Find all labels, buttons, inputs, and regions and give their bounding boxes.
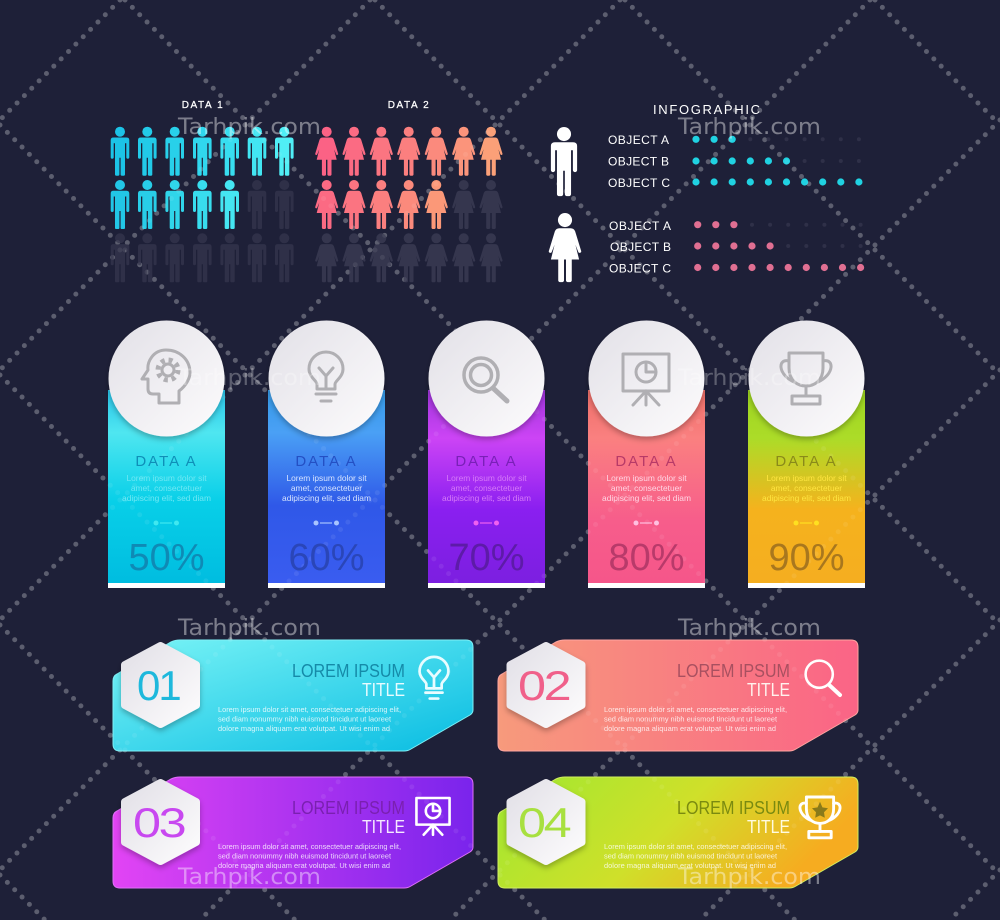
card body 50% <box>108 390 225 588</box>
banner 04 text: TITLE <box>747 817 790 837</box>
card 3 text: adipiscing elit, sed diam <box>442 493 531 503</box>
card 4 text: amet, consectetuer <box>611 483 682 493</box>
icon: magnifier <box>464 358 507 401</box>
card body 90% <box>748 390 865 588</box>
banner 03 text: TITLE <box>362 817 405 837</box>
number 04: 04 <box>518 799 571 846</box>
labels: female objects: OBJECT B <box>610 240 671 254</box>
hexagon badge 01 <box>125 646 196 724</box>
pictogram: data 1 men <box>111 127 294 282</box>
banner 01 text: Lorem ipsum dolor sit amet, consectetuer adipiscing elit, <box>218 705 401 714</box>
pictogram: data 2 women <box>315 127 503 282</box>
labels: male objects: OBJECT C <box>608 176 670 190</box>
card 5 text: DATA A <box>775 453 838 470</box>
labels: female objects <box>609 219 671 276</box>
watermarks: Tarhpik.com <box>177 865 321 890</box>
heading: data 2: DATA 2 <box>388 100 430 111</box>
dot scale: female <box>694 221 864 271</box>
icon: head with gear <box>142 350 190 403</box>
banner 03 text: dolore magna aliquam erat volutpat. Ut wisi enim ad <box>218 861 390 870</box>
icon: trophy <box>781 353 831 404</box>
icon: presentation board <box>623 354 669 405</box>
card 5 text: Lorem ipsum dolor sit <box>766 473 847 483</box>
circle badge 3 <box>428 320 544 436</box>
card 5 text: amet, consectetuer <box>771 483 842 493</box>
heading: infographic: INFOGRAPHIC <box>653 102 760 117</box>
banner 01 text <box>218 661 405 733</box>
number 03: 03 <box>133 799 185 846</box>
card 3 text <box>442 453 531 579</box>
labels: female objects: OBJECT C <box>609 262 671 276</box>
card 3 text: DATA A <box>455 453 518 470</box>
watermarks: Tarhpik.com <box>677 616 821 641</box>
card body 80% <box>588 390 705 588</box>
circle badge 4 <box>588 320 704 436</box>
card 1 text <box>122 453 211 579</box>
watermarks <box>177 115 821 890</box>
banner 03 body <box>113 777 473 888</box>
watermarks: Tarhpik.com <box>677 366 821 391</box>
banner 03 text: Lorem ipsum dolor sit amet, consectetuer adipiscing elit, <box>218 842 401 851</box>
labels: male objects: OBJECT B <box>608 154 669 168</box>
banner 01 text: TITLE <box>362 680 405 700</box>
circle badge 1 <box>108 320 224 436</box>
banner 02 text: LOREM IPSUM <box>677 661 790 681</box>
icon: white woman <box>549 213 581 282</box>
banner 02 text: dolore magna aliquam erat volutpat. Ut wisi enim ad <box>604 724 776 733</box>
card 4 text: DATA A <box>615 453 678 470</box>
banner 02 text: sed diam nonummy nibh euismod tincidunt ut laoreet <box>604 714 777 724</box>
number 02: 02 <box>518 662 570 709</box>
card 5 text <box>762 453 851 579</box>
watermarks: Tarhpik.com <box>177 366 321 391</box>
banner 03 text: LOREM IPSUM <box>292 798 405 818</box>
banner 01 text: sed diam nonummy nibh euismod tincidunt ut laoreet <box>218 714 391 724</box>
card 4 text <box>602 453 691 579</box>
card 2 text: Lorem ipsum dolor sit <box>286 473 367 483</box>
card 4 text: adipiscing elit, sed diam <box>602 493 691 503</box>
labels: female objects: OBJECT A <box>609 219 671 233</box>
labels: male objects: OBJECT A <box>608 133 669 147</box>
heading: data 1: DATA 1 <box>182 100 224 111</box>
watermarks: Tarhpik.com <box>677 115 821 140</box>
banner 04 text: Lorem ipsum dolor sit amet, consectetuer adipiscing elit, <box>604 842 787 851</box>
hexagon badge 02 <box>510 646 582 724</box>
icon: white man <box>551 127 577 196</box>
banner icon: magnifier <box>806 661 840 695</box>
banner icon: bulb <box>420 657 448 699</box>
banner 01 text: LOREM IPSUM <box>292 661 405 681</box>
card 3 text: Lorem ipsum dolor sit <box>446 473 527 483</box>
card body 60% <box>268 390 385 588</box>
card 1 text: adipiscing elit, sed diam <box>122 493 211 503</box>
card body 70% <box>428 390 545 588</box>
card 2 text <box>282 453 371 579</box>
watermarks: Tarhpik.com <box>677 865 821 890</box>
card 1 text: DATA A <box>135 453 198 470</box>
card 5 text: adipiscing elit, sed diam <box>762 493 851 503</box>
watermarks: Tarhpik.com <box>177 616 321 641</box>
card 2 text: amet, consectetuer <box>291 483 362 493</box>
banner 01 body <box>113 640 473 751</box>
banner 04 text <box>604 798 790 870</box>
banner 02 text: Lorem ipsum dolor sit amet, consectetuer adipiscing elit, <box>604 705 787 714</box>
hexagon badge 03 <box>125 783 196 861</box>
banner 04 text: LOREM IPSUM <box>677 798 790 818</box>
banner 04 body <box>498 777 858 888</box>
icon: light bulb <box>309 352 343 401</box>
banner 04 text: dolore magna aliquam erat volutpat. Ut wisi enim ad <box>604 861 776 870</box>
watermarks: Tarhpik.com <box>177 115 321 140</box>
card 5 text: 90% <box>768 537 845 579</box>
banner icon: presentation <box>416 798 450 835</box>
labels: male objects <box>608 133 670 190</box>
card 1 text: 50% <box>128 537 205 579</box>
circle badge 2 <box>268 320 384 436</box>
banner 02 text <box>604 661 790 733</box>
card 2 text: DATA A <box>295 453 358 470</box>
card 1 text: amet, consectetuer <box>131 483 202 493</box>
banner icon: trophy <box>800 797 840 838</box>
circle badge 5 <box>748 320 864 436</box>
banner 02 text: TITLE <box>747 680 790 700</box>
card 2 text: adipiscing elit, sed diam <box>282 493 371 503</box>
banner 03 text: sed diam nonummy nibh euismod tincidunt ut laoreet <box>218 852 391 860</box>
card 4 text: Lorem ipsum dolor sit <box>606 473 687 483</box>
card 2 text: 60% <box>288 537 365 579</box>
banner 01 text: dolore magna aliquam erat volutpat. Ut wisi enim ad <box>218 724 390 733</box>
banner 02 body <box>498 640 858 751</box>
card 3 text: amet, consectetuer <box>451 483 522 493</box>
card 1 text: Lorem ipsum dolor sit <box>126 473 207 483</box>
banner 04 text: sed diam nonummy nibh euismod tincidunt ut laoreet <box>604 852 777 860</box>
card 4 text: 80% <box>608 537 685 579</box>
hexagon badge 04 <box>510 783 582 861</box>
card 3 text: 70% <box>448 537 525 579</box>
banner 03 text <box>218 798 405 870</box>
dot scale: male <box>692 136 863 186</box>
number 01: 01 <box>137 662 180 709</box>
